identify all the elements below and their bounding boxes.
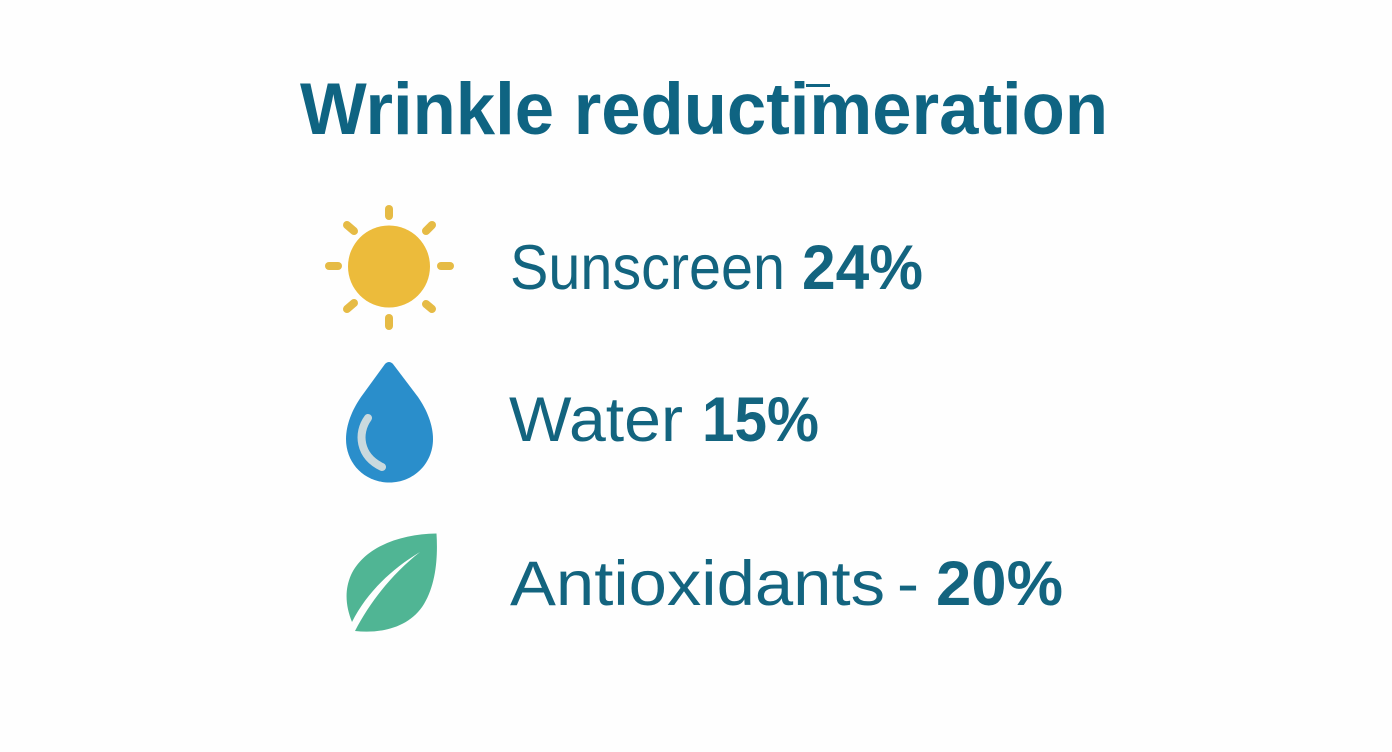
row: sunscreen: Sunscreen (510, 233, 785, 303)
row: antioxidants (510, 549, 1063, 619)
icon: water drop (346, 362, 433, 482)
icon: leaf (347, 534, 437, 632)
row: water (509, 385, 819, 455)
row: water: 15% (702, 385, 819, 455)
row: antioxidants: 20% (936, 549, 1063, 619)
title: Wrinkle reductimeration (300, 69, 1108, 150)
row: sunscreen: 24% (802, 233, 923, 303)
icon: sun (329, 209, 450, 326)
row: water: Water (509, 385, 683, 455)
row: antioxidants: Antioxidants (510, 549, 885, 619)
row: antioxidants: - (897, 549, 919, 619)
